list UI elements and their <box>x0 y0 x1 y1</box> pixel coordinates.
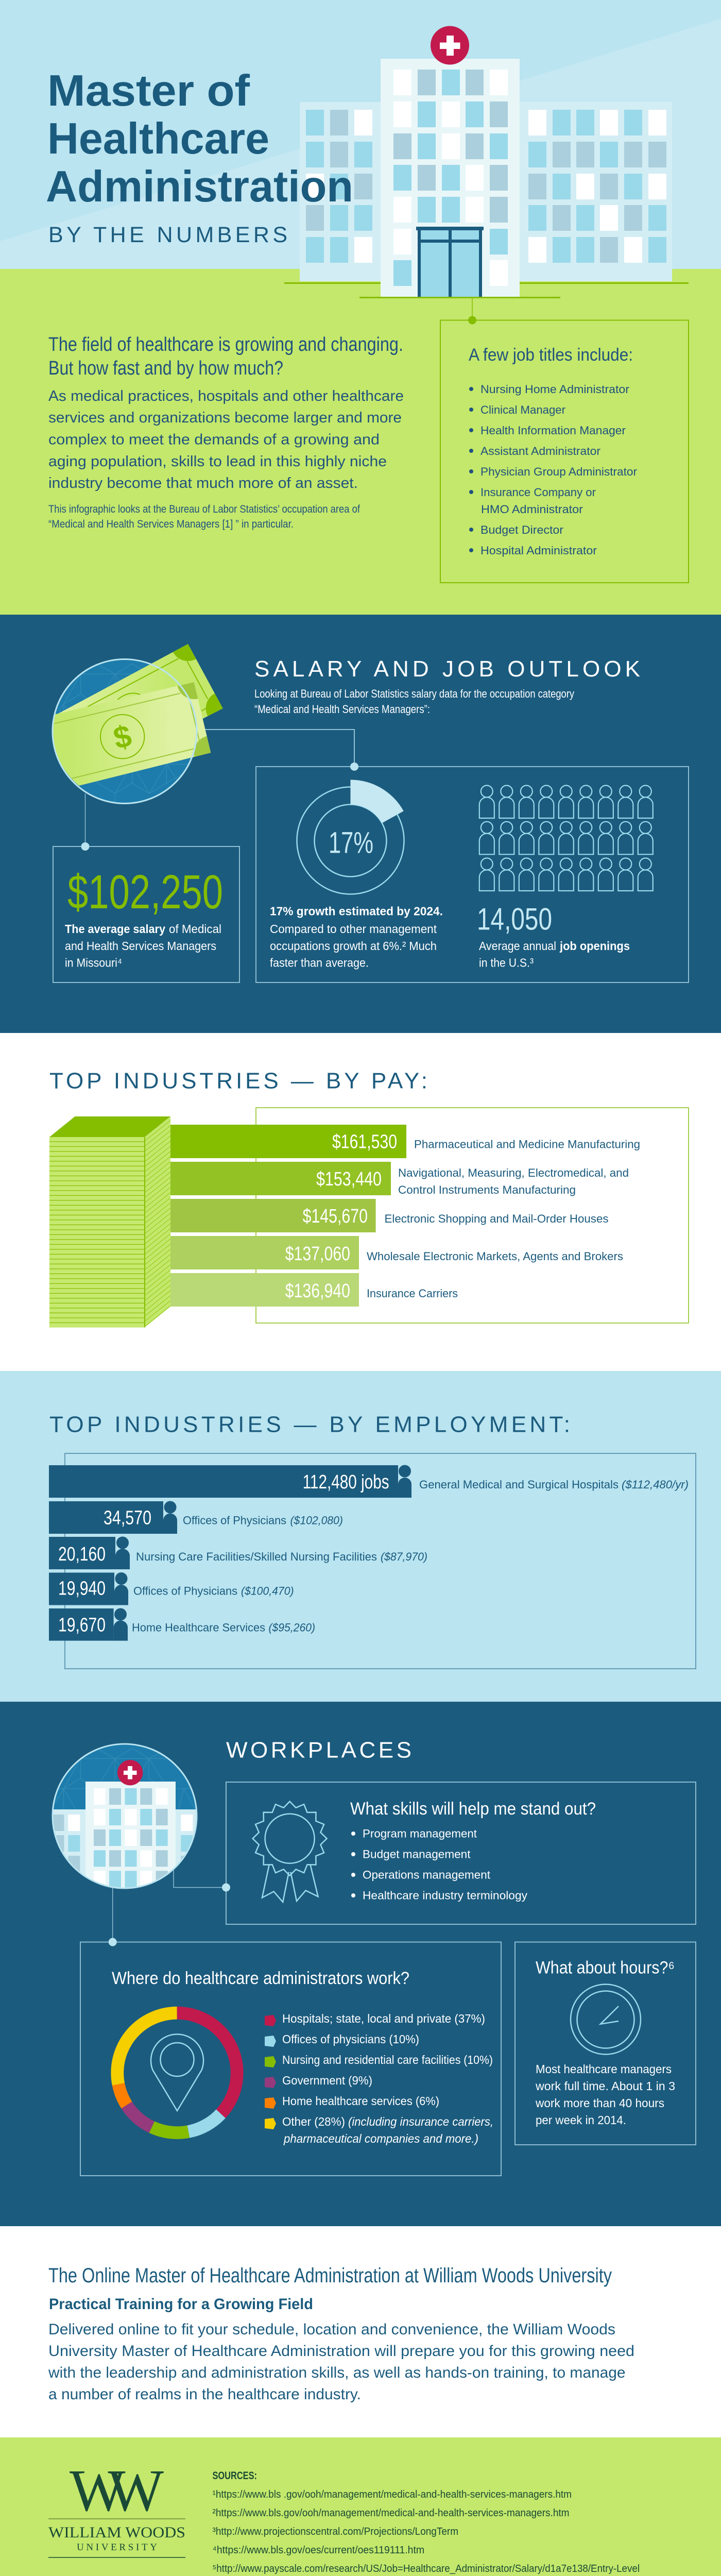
legend <box>265 2012 493 2145</box>
back bill <box>58 644 223 719</box>
bar: electronic shopping <box>170 1199 609 1232</box>
hours text: work more than 40 hours <box>535 2096 664 2110</box>
section: program background <box>0 2226 721 2437</box>
intro paragraph: As medical practices, hospitals and other healthcare <box>48 388 404 404</box>
bar: offices of physicians second: ($100,470) <box>241 1585 294 1597</box>
salary intro text: Looking at Bureau of Labor Statistics salary data for the occupation category <box>254 687 574 700</box>
bar: offices of physicians second: 19,940 <box>58 1578 106 1599</box>
intro note: This infographic looks at the Bureau of Labor Statistics’ occupation area of <box>48 503 360 515</box>
job openings caption: Average annual <box>479 939 556 953</box>
bar: nursing care: Nursing Care Facilities/Skilled Nursing Facilities <box>136 1550 377 1563</box>
legend: (including insurance carriers, <box>348 2115 493 2128</box>
bar: nursing care <box>49 1536 427 1569</box>
sources list: ¹https://www.bls .gov/ooh/management/medical-and-health-services-managers.htm <box>212 2489 572 2500</box>
heading: top industries by pay: TOP INDUSTRIES — BY PAY: <box>49 1069 427 1093</box>
program paragraph: a number of realms in the healthcare industry. <box>48 2386 361 2403</box>
panel: pay chart frame <box>256 1108 689 1323</box>
section: hero sky background <box>0 0 721 269</box>
connector lines: salary <box>85 730 354 846</box>
panel: job titles <box>440 320 689 583</box>
bar: navigational: Navigational, Measuring, Electromedical, and <box>398 1166 629 1179</box>
skills list: Program management <box>363 1827 477 1840</box>
job titles heading: A few job titles include: <box>469 345 633 365</box>
bar: electronic shopping: $145,670 <box>303 1206 368 1227</box>
job titles list: Insurance Company or <box>480 486 596 499</box>
bar: general hospitals <box>49 1465 689 1498</box>
intro heading: But how fast and by how much? <box>48 358 283 379</box>
skills list: Healthcare industry terminology <box>363 1889 527 1902</box>
bar: home healthcare: ($95,260) <box>269 1621 315 1634</box>
salary caption: and Health Services Managers <box>65 939 216 953</box>
bar: offices of physicians <box>49 1501 343 1534</box>
subheading: practical training: Practical Training for a Growing Field <box>49 2296 313 2313</box>
subtitle: BY THE NUMBERS <box>48 223 287 247</box>
legend: Nursing and residential care facilities (10%) <box>282 2053 493 2066</box>
title <box>46 66 353 211</box>
intro heading <box>48 334 403 379</box>
bar: nursing care: ($87,970) <box>381 1550 427 1563</box>
bar: offices of physicians second <box>49 1572 294 1605</box>
section: sources background <box>0 2437 721 2576</box>
bar: navigational: Control Instruments Manufacturing <box>398 1183 576 1196</box>
job titles list: Nursing Home Administrator <box>480 383 629 396</box>
bar: offices of physicians: Offices of Physicians <box>183 1514 286 1527</box>
intro note: “Medical and Health Services Managers [1] ” in particular. <box>48 518 294 530</box>
hours text <box>535 2062 675 2127</box>
front bill <box>54 682 211 786</box>
bar: general hospitals: ($112,480/yr) <box>622 1478 689 1491</box>
job titles list: Clinical Manager <box>480 403 565 416</box>
legend: Other (28%) <box>282 2115 345 2128</box>
salary caption: in Missouri⁴ <box>65 956 122 970</box>
icon: money in circle <box>52 644 223 804</box>
donut: 17 percent growth <box>297 780 404 894</box>
bar: insurance <box>170 1273 458 1307</box>
bar: pharmaceutical: Pharmaceutical and Medicine Manufacturing <box>414 1138 640 1151</box>
heading: top industries by employment: TOP INDUSTRIES — BY EMPLOYMENT: <box>49 1412 570 1437</box>
salary caption <box>65 922 221 970</box>
program paragraph: University Master of Healthcare Administration will prepare you for this growing need <box>48 2343 634 2360</box>
bar: insurance: $136,940 <box>285 1280 350 1302</box>
bar: general hospitals: General Medical and Surgical Hospitals <box>419 1478 619 1491</box>
illustration: hospital building <box>284 26 689 298</box>
panel: skills <box>222 1782 696 1924</box>
connector to job titles <box>468 298 476 325</box>
logo: William Woods University <box>48 2458 185 2557</box>
panel: average salary <box>53 842 239 982</box>
growth caption: Compared to other management <box>270 922 437 936</box>
title: Master of <box>47 66 250 115</box>
job openings caption: in the U.S.³ <box>479 956 534 970</box>
donut: 17 percent growth: 17% <box>329 826 373 859</box>
salary intro text: “Medical and Health Services Managers”: <box>254 703 430 716</box>
logo: William Woods University: WW <box>70 2458 164 2523</box>
title: Healthcare <box>47 114 269 163</box>
donut chart: workplaces <box>117 2013 237 2133</box>
hours text: Most healthcare managers <box>536 2062 672 2076</box>
skills list: Budget management <box>363 1848 471 1861</box>
sources list: ³http://www.projectionscentral.com/Projections/LongTerm <box>212 2526 458 2537</box>
growth caption: occupations growth at 6%.² Much <box>270 939 437 953</box>
bar: pharmaceutical <box>170 1125 640 1158</box>
job titles list: Assistant Administrator <box>480 445 600 457</box>
panel: hours <box>515 1942 696 2145</box>
intro paragraph: complex to meet the demands of a growing and <box>48 432 380 448</box>
panel: intro text <box>48 334 404 530</box>
intro paragraph <box>48 388 404 492</box>
sources list: ²https://www.bls.gov/ooh/management/medical-and-health-services-managers.htm <box>212 2507 570 2519</box>
job titles list: HMO Administrator <box>481 503 583 516</box>
legend: Home healthcare services (6%) <box>282 2094 439 2108</box>
logo: William Woods University: WILLIAM WOODS <box>48 2524 185 2541</box>
panel: employment chart frame <box>65 1453 696 1669</box>
bar: home healthcare <box>49 1608 315 1641</box>
bar: wholesale: Wholesale Electronic Markets, Agents and Brokers <box>367 1250 623 1263</box>
icon: award ribbon <box>253 1802 327 1902</box>
icons: people grid <box>479 785 653 891</box>
icon: hospital in circle <box>52 1741 198 1892</box>
salary caption: of Medical <box>169 922 221 936</box>
program paragraph: with the leadership and administration skills, as well as hands-on training, to manage <box>48 2364 626 2381</box>
bar: wholesale: $137,060 <box>285 1243 350 1265</box>
skills list: Operations management <box>363 1868 490 1882</box>
growth caption <box>270 905 443 970</box>
intro paragraph: industry become that much more of an asset. <box>48 475 358 492</box>
where heading: Where do healthcare administrators work? <box>112 1969 409 1988</box>
sources list: SOURCES: <box>212 2470 257 2482</box>
hours text: per week in 2014. <box>536 2113 626 2127</box>
bar: insurance: Insurance Carriers <box>367 1287 458 1300</box>
hours text: work full time. About 1 in 3 <box>535 2079 675 2093</box>
bar: offices of physicians second: Offices of Physicians <box>133 1585 237 1597</box>
job titles list: Health Information Manager <box>480 424 626 437</box>
sources list: ⁴https://www.bls.gov/oes/current/oes119111.htm <box>212 2545 424 2556</box>
growth caption: 17% growth estimated by 2024. <box>270 905 443 918</box>
bar: home healthcare: Home Healthcare Services <box>132 1621 265 1634</box>
logo: William Woods University: UNIVERSITY <box>77 2542 157 2553</box>
heading: salary and job outlook: SALARY AND JOB OUTLOOK <box>254 656 640 682</box>
bar chart: pay <box>170 1125 640 1307</box>
bar: offices of physicians: 34,570 <box>104 1507 151 1529</box>
skills heading: What skills will help me stand out? <box>350 1799 596 1819</box>
sources list: ⁵http://www.payscale.com/research/US/Job=Healthcare_Administrator/Salary/d1a7e138/Entry-Level <box>212 2563 640 2574</box>
panel: where administrators work <box>80 1938 501 2176</box>
salary caption: The average salary <box>65 922 165 936</box>
intro paragraph: aging population, skills to lead in this highly niche <box>48 453 387 470</box>
intro heading: The field of healthcare is growing and changing. <box>48 334 403 355</box>
sources list <box>212 2470 640 2576</box>
bar: general hospitals: 112,480 jobs <box>303 1471 389 1493</box>
section: top industries by pay background <box>0 1033 721 1371</box>
program paragraph: Delivered online to fit your schedule, location and convenience, the William Woods <box>48 2321 615 2338</box>
icon: location pin <box>151 2034 203 2111</box>
section: salary background <box>0 615 721 1033</box>
bar: electronic shopping: Electronic Shopping and Mail-Order Houses <box>384 1212 609 1225</box>
intro note <box>48 503 360 530</box>
skills list <box>351 1827 527 1902</box>
growth caption: faster than average. <box>270 956 369 970</box>
section: green intro background <box>0 269 721 615</box>
legend: Government (9%) <box>282 2074 372 2087</box>
legend: pharmaceutical companies and more.) <box>283 2132 478 2145</box>
front bill: $ <box>110 718 135 756</box>
job titles list: Budget Director <box>480 523 563 536</box>
intro paragraph: services and organizations become larger and more <box>48 410 402 426</box>
bar chart: employment <box>49 1465 689 1641</box>
job openings caption <box>479 939 630 970</box>
job openings caption: job openings <box>559 939 630 953</box>
bar: navigational <box>170 1162 629 1196</box>
heading: workplaces: WORKPLACES <box>226 1737 411 1763</box>
bar: offices of physicians: ($102,080) <box>290 1514 343 1527</box>
salary intro text <box>254 687 574 716</box>
bar: nursing care: 20,160 <box>58 1544 106 1565</box>
legend: Offices of physicians (10%) <box>282 2032 419 2046</box>
job titles list: Physician Group Administrator <box>480 465 637 478</box>
program paragraph <box>48 2321 634 2403</box>
job titles list: Hospital Administrator <box>480 544 597 557</box>
title: Administration <box>46 162 353 211</box>
bar: pharmaceutical: $161,530 <box>332 1131 397 1153</box>
bar: wholesale <box>170 1236 623 1269</box>
hours heading: What about hours?⁶ <box>536 1958 675 1977</box>
icon: clock <box>571 1985 641 2055</box>
section: top industries by employment background <box>0 1371 721 1702</box>
icon: stack of money <box>49 1116 170 1327</box>
job titles list <box>469 383 637 557</box>
panel: growth and job openings <box>256 762 689 982</box>
job openings figure: 14,050 <box>477 902 552 937</box>
bar: home healthcare: 19,670 <box>58 1615 106 1636</box>
section: workplaces background <box>0 1702 721 2226</box>
legend: Hospitals; state, local and private (37%) <box>282 2012 485 2025</box>
bar: navigational: $153,440 <box>316 1168 382 1190</box>
connector lines: workplaces <box>113 1869 226 1942</box>
salary figure: $102,250 <box>67 865 223 919</box>
